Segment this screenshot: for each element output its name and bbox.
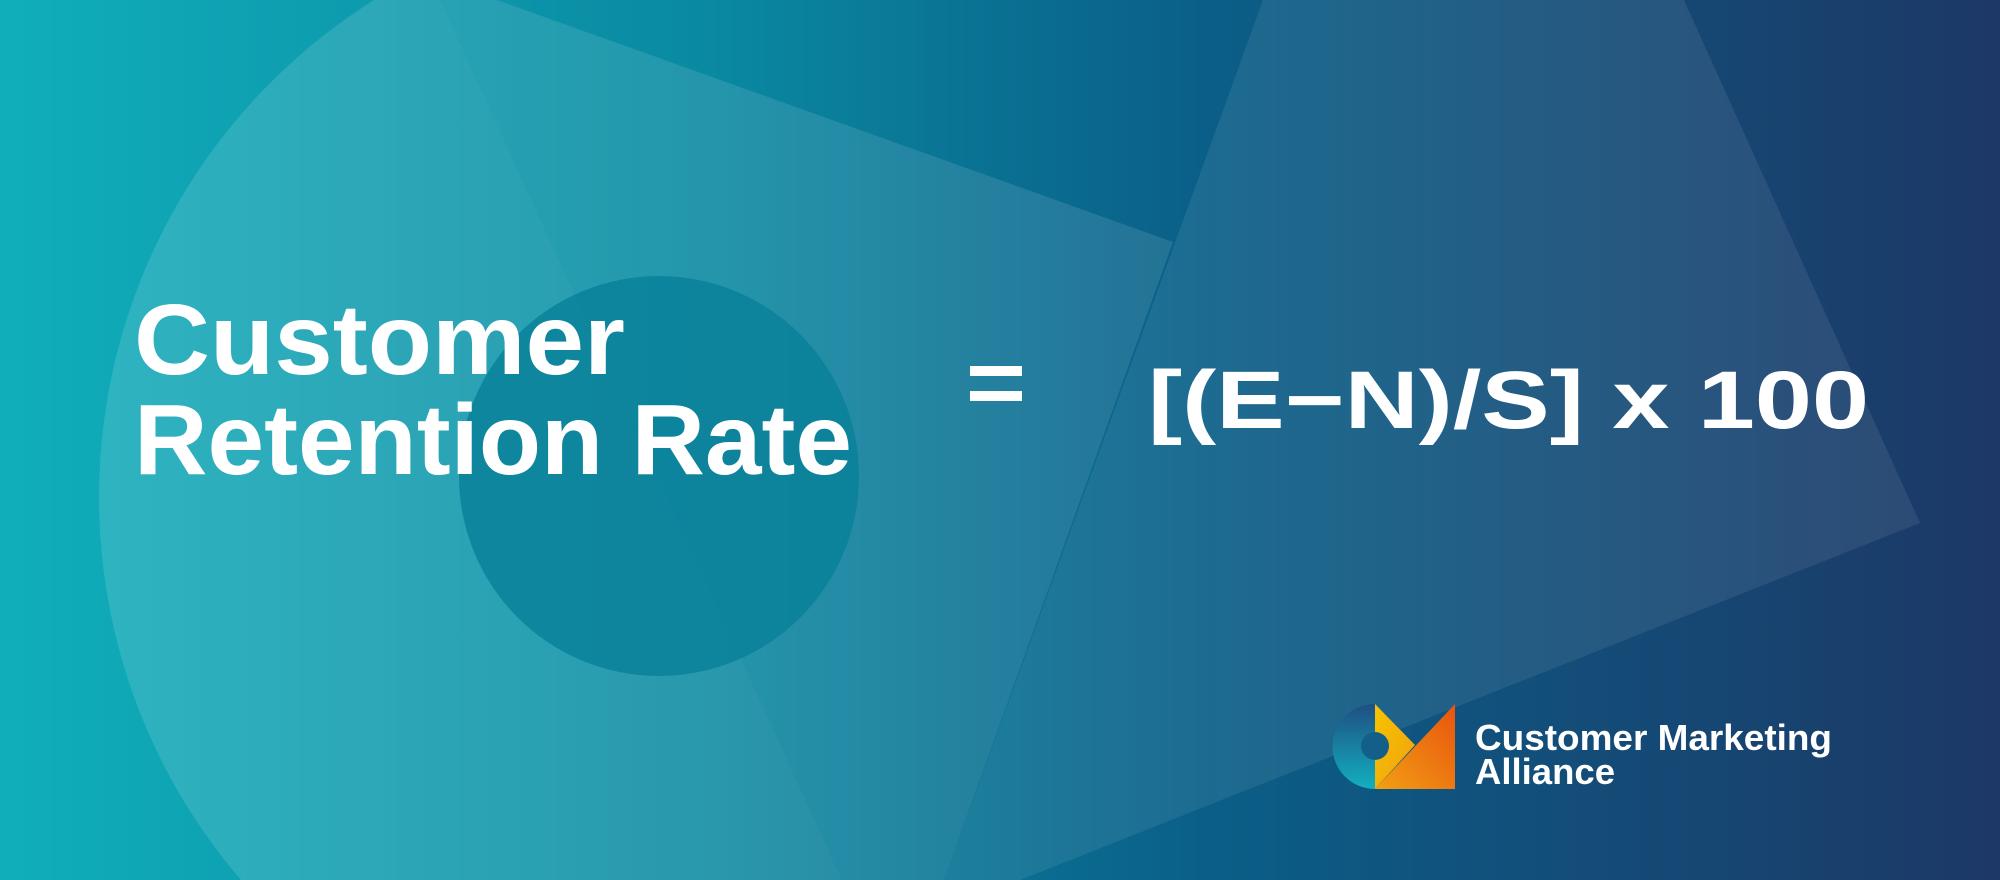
equals sign xyxy=(970,366,1022,401)
logo text: Customer Marketing xyxy=(1475,717,1832,758)
logo xyxy=(1333,704,1832,792)
logo text: Alliance xyxy=(1475,751,1615,792)
title xyxy=(134,284,852,496)
logo text xyxy=(1475,717,1832,792)
formula: [(E−N)/S] x 100 xyxy=(1148,355,1869,446)
icon: logo mark xyxy=(1333,704,1455,789)
title: Customer xyxy=(134,284,625,396)
title: Retention Rate xyxy=(134,384,852,496)
